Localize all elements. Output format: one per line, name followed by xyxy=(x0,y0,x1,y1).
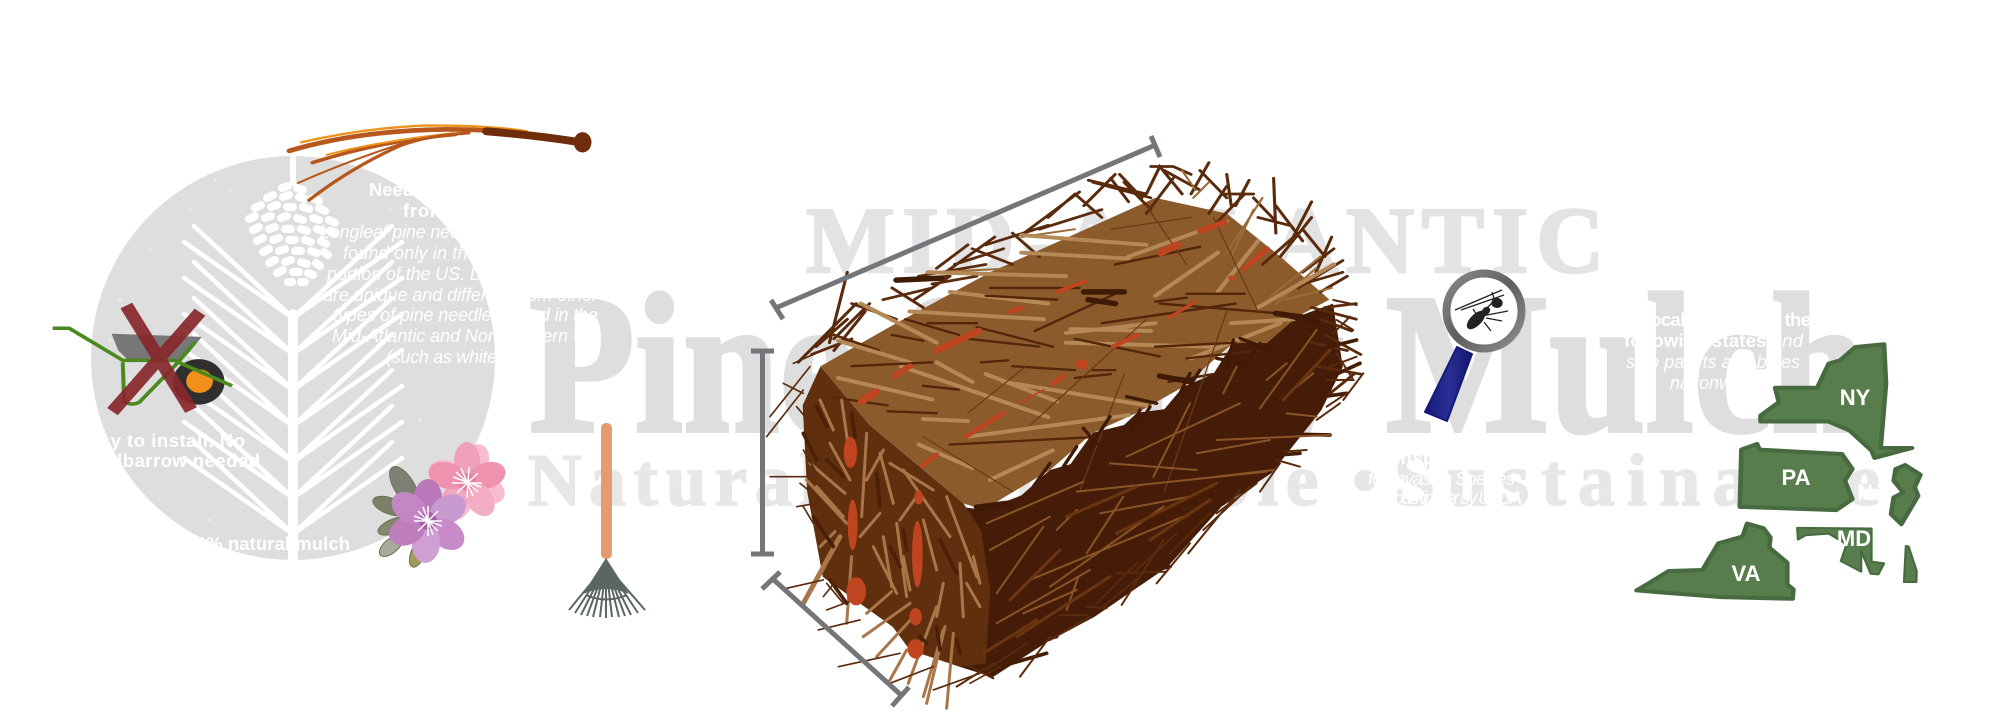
bale of pine straw xyxy=(767,163,1363,708)
label: MD: MD xyxy=(1837,526,1871,551)
icon: pine branch xyxy=(184,157,402,559)
text block: inspected xyxy=(1362,447,1522,508)
text block: longleaf needles: found only in the southeastern xyxy=(343,243,589,263)
icon: pine cone xyxy=(249,186,335,282)
text block: longleaf needles: Longleaf pine needles are exclusively xyxy=(320,222,613,242)
icon: crossed out wheelbarrow xyxy=(53,306,232,412)
text block: easy to install xyxy=(68,430,260,471)
text block: longleaf needles: (such as white pine). xyxy=(386,347,545,367)
dimension bracket: width xyxy=(762,572,909,706)
label: PA: PA xyxy=(1782,465,1811,490)
subtitle: natural renewable: Natural • Renewable • xyxy=(528,440,1378,522)
text block: natural mulch: 100% natural mulch xyxy=(175,533,350,554)
text block: inspected: for Invasive Species xyxy=(1368,469,1515,489)
dimension bracket: height xyxy=(751,351,774,554)
text block: inspected: Cautious timber by USDA xyxy=(1362,488,1522,508)
state: New York xyxy=(1761,344,1912,458)
text block: locally sourced: We locally source in the xyxy=(1615,309,1811,330)
text block: longleaf needles: Needles are harvested xyxy=(369,179,563,200)
dimension bracket: length xyxy=(771,136,1160,319)
icon: red cross xyxy=(112,306,200,412)
text block: longleaf needles xyxy=(320,179,613,367)
text block: easy to install: wheelbarrow needed xyxy=(68,450,260,471)
ant xyxy=(1455,290,1508,331)
icon: pine needle xyxy=(289,125,591,200)
bale: front strands xyxy=(767,350,1000,708)
text block: longleaf needles: Mid-Atlantic and Northeastern US xyxy=(332,326,598,346)
label: VA: VA xyxy=(1732,561,1761,586)
state: New Jersey xyxy=(1891,465,1920,524)
text block: longleaf needles: from longleaf xyxy=(403,200,530,221)
text block: longleaf needles: portion of the US. Longleaf needles xyxy=(326,264,605,284)
state: Delaware xyxy=(1904,546,1917,582)
text block: locally sourced xyxy=(1615,309,1811,393)
icon: magnifying glass with ant xyxy=(1425,274,1522,421)
bale: orange ties xyxy=(844,222,1267,659)
bale: top dark strands xyxy=(834,247,1303,445)
pink flower xyxy=(425,440,509,524)
text block: easy to install: Easy to install. No xyxy=(76,430,245,451)
label: NJ: NJ xyxy=(1857,480,1885,505)
text block: locally sourced: following states and xyxy=(1624,330,1804,351)
heading: Mid-Atlantic: MID-ATLANTIC xyxy=(806,189,1604,293)
state: Pennsylvania xyxy=(1740,444,1852,510)
state: Maryland xyxy=(1797,528,1884,574)
text block: locally sourced: nationwide xyxy=(1670,373,1756,393)
icon: flowers xyxy=(370,440,509,570)
purple flower xyxy=(384,479,471,564)
subtitle: sustainable: Sustainable xyxy=(1394,440,1880,522)
text block: longleaf needles: types of pine needles found in the xyxy=(333,305,598,325)
bale: right dark side xyxy=(960,304,1343,677)
text block: locally sourced: ship pallets and bales xyxy=(1626,352,1800,372)
icon: rake xyxy=(569,423,645,618)
bale: right side strands xyxy=(957,300,1363,687)
leaves xyxy=(370,462,430,570)
bale: top face xyxy=(821,198,1329,510)
bale: top light strands xyxy=(838,221,1334,480)
bale: fringe strands xyxy=(798,163,1361,398)
state: Virginia xyxy=(1637,524,1793,599)
text block: longleaf needles: are unique and different from other xyxy=(323,285,599,305)
label: NY: NY xyxy=(1840,385,1871,410)
bale: front face xyxy=(803,366,990,667)
map: states served xyxy=(1637,344,1920,599)
text block: inspected: Inspected xyxy=(1395,447,1485,468)
panel: pine emblem circle xyxy=(91,156,495,560)
